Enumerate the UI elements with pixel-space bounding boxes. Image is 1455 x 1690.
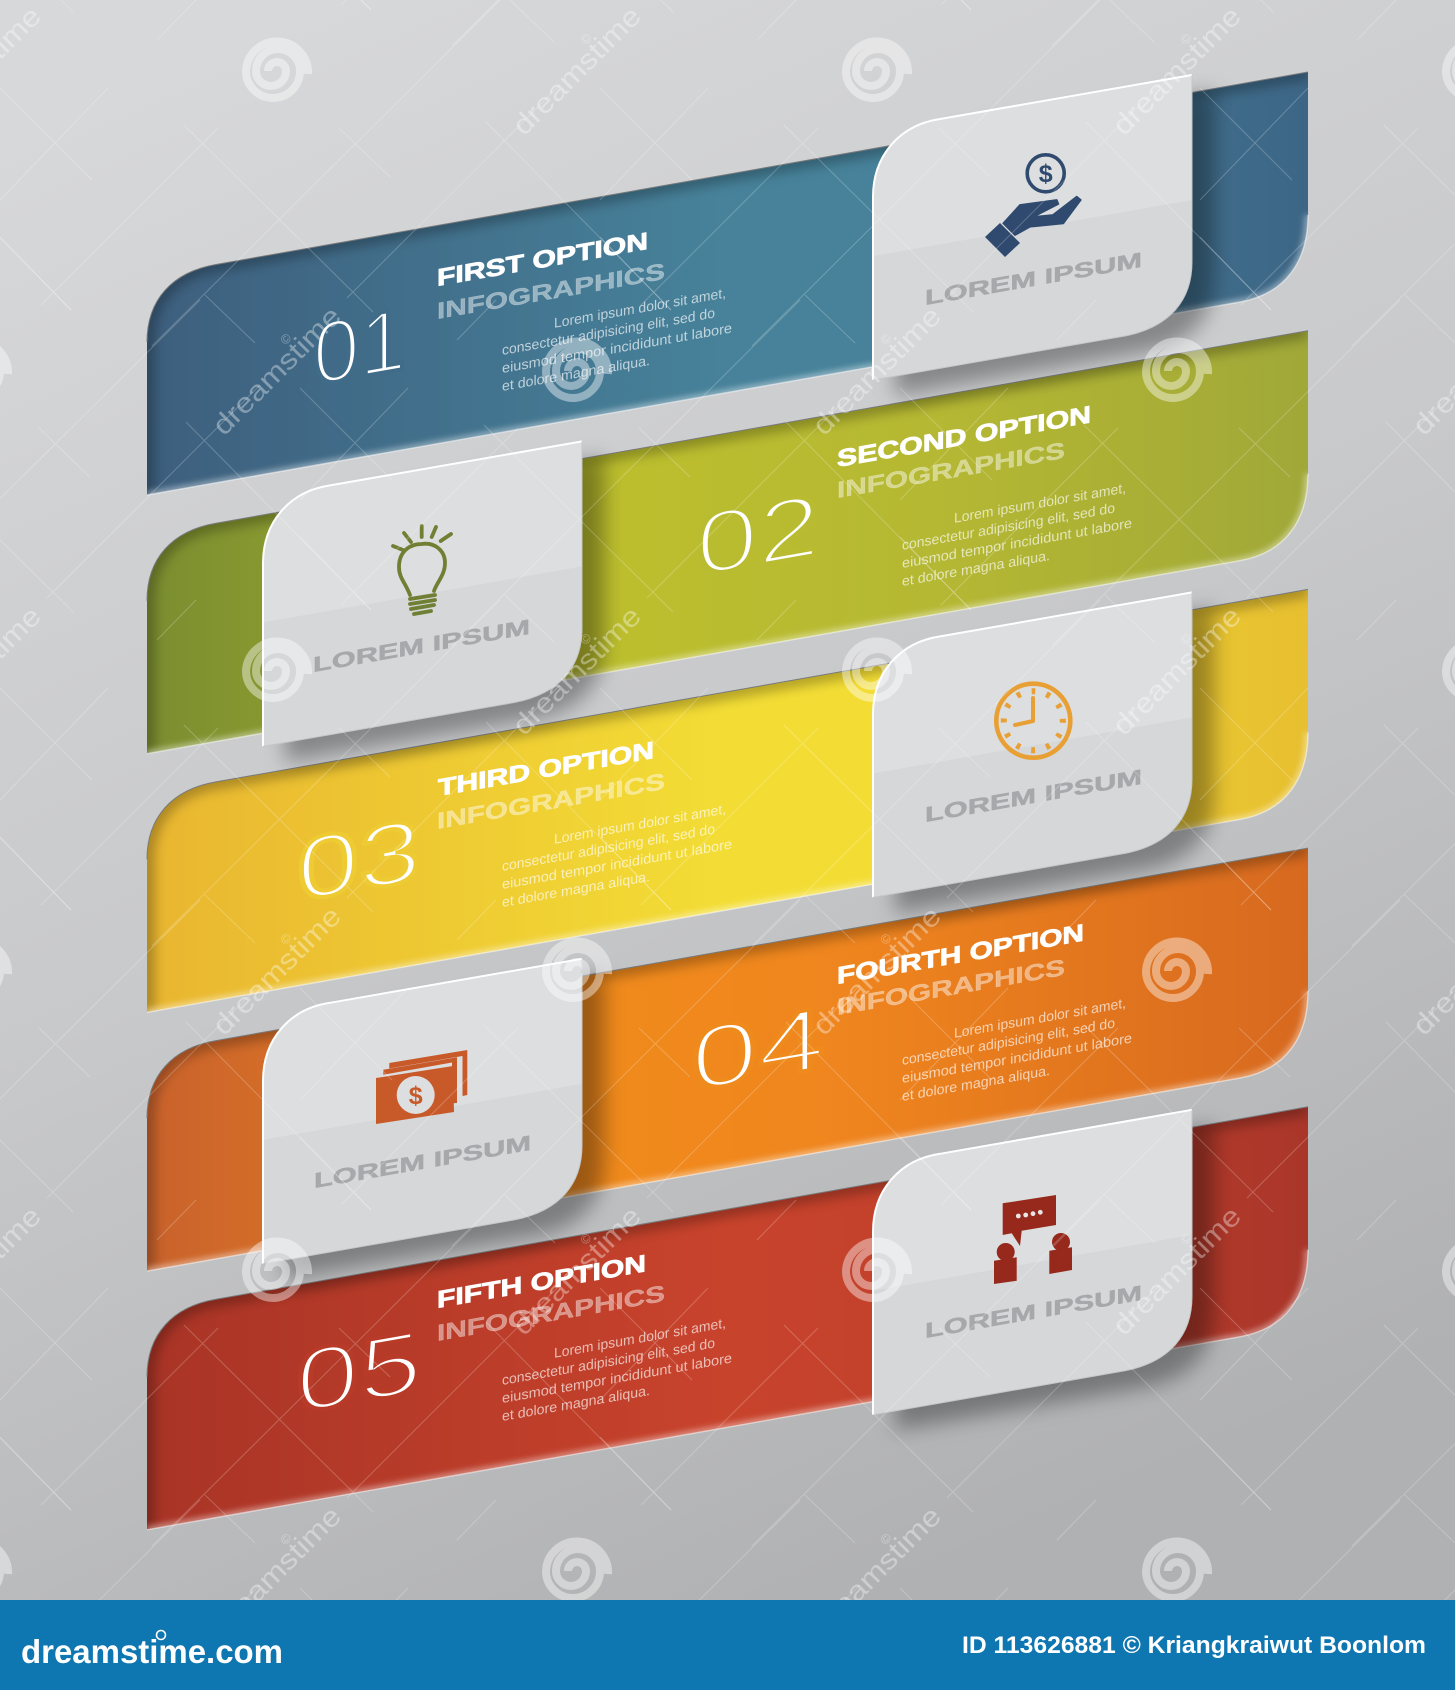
text block: Lorem ipsum dolor sit amet, bbox=[954, 480, 1126, 526]
watermark overlay: dreamstime bbox=[1106, 1200, 1247, 1341]
text block: et dolore magna aliqua. bbox=[502, 352, 650, 394]
text block: et dolore magna aliqua. bbox=[902, 1062, 1050, 1104]
text block: eiusmod tempor incididunt ut labore bbox=[902, 515, 1132, 571]
text block: et dolore magna aliqua. bbox=[902, 547, 1050, 589]
icon: logo spiral bbox=[156, 1630, 166, 1640]
text block: Lorem ipsum dolor sit amet, bbox=[554, 801, 726, 847]
number 03: 03 bbox=[297, 800, 421, 920]
heading: fifth option: FIFTH OPTION bbox=[437, 1250, 646, 1314]
watermark overlay: dreamstime bbox=[506, 0, 647, 141]
watermark overlay: dreamstime bbox=[206, 1500, 347, 1641]
panel: ribbon 4 bbox=[147, 848, 1308, 1271]
subheading: infographics: INFOGRAPHICS bbox=[837, 954, 1065, 1020]
text block: eiusmod tempor incididunt ut labore bbox=[502, 320, 732, 376]
label: lorem ipsum: LOREM IPSUM bbox=[314, 1132, 531, 1193]
watermark overlay: dreamstime bbox=[1106, 0, 1247, 141]
text block: eiusmod tempor incididunt ut labore bbox=[502, 836, 732, 892]
watermark overlay: © bbox=[277, 1530, 295, 1548]
watermark overlay: © bbox=[577, 1230, 595, 1248]
text block: Lorem ipsum dolor sit amet, bbox=[954, 995, 1126, 1041]
text block: consectetur adipisicing elit, sed do bbox=[902, 500, 1115, 553]
panel: ribbon 5 bbox=[147, 1107, 1308, 1530]
text block: eiusmod tempor incididunt ut labore bbox=[902, 1030, 1132, 1086]
watermark overlay: dreamstime bbox=[806, 900, 947, 1041]
heading: first option: FIRST OPTION bbox=[437, 228, 648, 292]
text block: et dolore magna aliqua. bbox=[502, 868, 650, 910]
icon: money stack: $ bbox=[409, 1082, 423, 1110]
panel: ribbon 3 bbox=[147, 589, 1308, 1012]
panel: card 4 bbox=[263, 959, 604, 1284]
image credit: ID 113626881 © Kriangkraiwut Boonlom bbox=[962, 1632, 1426, 1659]
footer logo: dreamstime.com bbox=[21, 1633, 283, 1670]
text block bbox=[902, 479, 1132, 589]
label: lorem ipsum: LOREM IPSUM bbox=[925, 1282, 1142, 1343]
icon: light bulb bbox=[393, 526, 451, 614]
subheading: infographics: INFOGRAPHICS bbox=[837, 437, 1065, 503]
footer bar bbox=[0, 1600, 1455, 1690]
text block: consectetur adipisicing elit, sed do bbox=[502, 821, 715, 874]
text block: consectetur adipisicing elit, sed do bbox=[502, 305, 715, 358]
watermark overlay: dreamstime bbox=[806, 1500, 947, 1641]
watermark overlay: dreamstime bbox=[506, 600, 647, 741]
watermark overlay: © bbox=[1177, 1230, 1195, 1248]
watermark overlay: © bbox=[277, 930, 295, 948]
label: lorem ipsum: LOREM IPSUM bbox=[925, 766, 1142, 827]
subheading: infographics: INFOGRAPHICS bbox=[437, 768, 665, 834]
panel: card 5 bbox=[873, 1110, 1214, 1435]
text block bbox=[902, 994, 1132, 1104]
watermark overlay: © bbox=[1177, 630, 1195, 648]
text block: et dolore magna aliqua. bbox=[502, 1382, 650, 1424]
heading: fourth option: FOURTH OPTION bbox=[837, 920, 1084, 990]
icon: money stack bbox=[376, 1050, 467, 1124]
panel: card 1 bbox=[873, 75, 1214, 400]
watermark overlay: dreamstime bbox=[506, 1200, 647, 1341]
watermark overlay: dreamstime bbox=[1106, 600, 1247, 741]
icon: hand with coin bbox=[985, 155, 1081, 257]
icon: clock bbox=[996, 684, 1070, 758]
text block: eiusmod tempor incididunt ut labore bbox=[502, 1350, 732, 1406]
icon: two people talking bbox=[994, 1195, 1072, 1284]
watermark overlay: © bbox=[577, 630, 595, 648]
watermark overlay: dreamstime bbox=[206, 300, 347, 441]
heading: third option: THIRD OPTION bbox=[438, 737, 654, 802]
watermark overlay: © bbox=[1177, 30, 1195, 48]
label: lorem ipsum: LOREM IPSUM bbox=[313, 616, 530, 677]
icon: hand with coin: $ bbox=[1039, 160, 1053, 188]
number 02: 02 bbox=[696, 475, 820, 595]
watermark overlay: © bbox=[877, 330, 895, 348]
panel: card 3 bbox=[873, 592, 1214, 917]
watermark overlay: dreamstime bbox=[806, 300, 947, 441]
text block: Lorem ipsum dolor sit amet, bbox=[554, 1315, 726, 1361]
label: lorem ipsum: LOREM IPSUM bbox=[925, 249, 1142, 310]
watermark overlay: © bbox=[877, 1530, 895, 1548]
panel: card 2 bbox=[263, 441, 604, 766]
watermark overlay: © bbox=[577, 30, 595, 48]
number 01: 01 bbox=[313, 289, 406, 404]
text block bbox=[502, 284, 732, 394]
text block: consectetur adipisicing elit, sed do bbox=[502, 1335, 715, 1388]
panel: ribbon 1 bbox=[147, 72, 1308, 495]
watermark overlay: © bbox=[877, 930, 895, 948]
number 05: 05 bbox=[296, 1311, 422, 1432]
panel: ribbon 2 bbox=[147, 331, 1308, 754]
watermark overlay: © bbox=[277, 330, 295, 348]
subheading: infographics: INFOGRAPHICS bbox=[437, 1280, 665, 1346]
text block bbox=[502, 800, 732, 910]
text block: Lorem ipsum dolor sit amet, bbox=[554, 285, 726, 331]
heading: second option: SECOND OPTION bbox=[837, 401, 1091, 473]
text block bbox=[502, 1314, 732, 1424]
text block: consectetur adipisicing elit, sed do bbox=[902, 1015, 1115, 1068]
watermark overlay: dreamstime bbox=[206, 900, 347, 1041]
number 04: 04 bbox=[691, 988, 825, 1110]
subheading: infographics: INFOGRAPHICS bbox=[437, 258, 665, 324]
